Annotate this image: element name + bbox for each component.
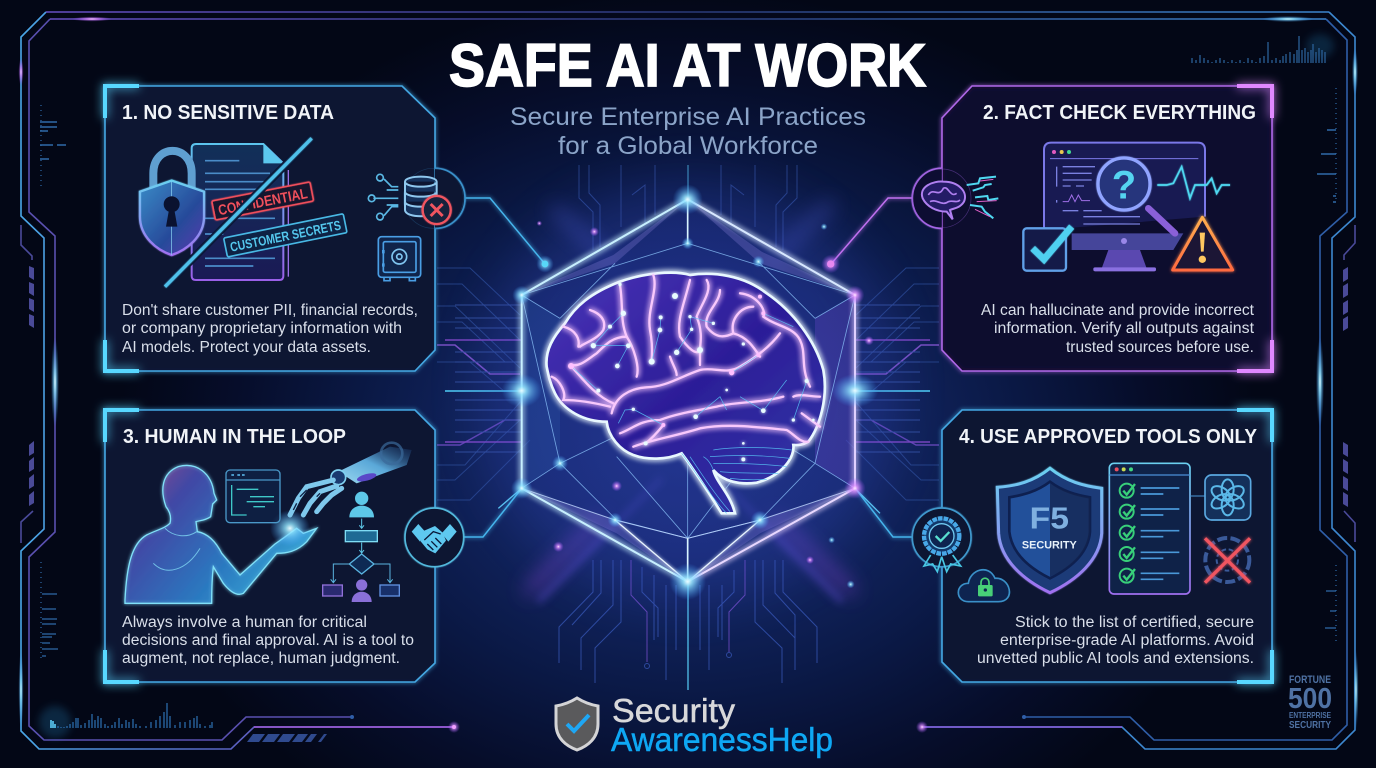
panel 1 body text: Don't share customer PII, financial records, xyxy=(122,302,418,319)
warning triangle icon xyxy=(1173,217,1233,270)
monitor icon xyxy=(1044,143,1205,271)
polyhedron inner lines xyxy=(522,243,855,538)
panel 2 body text: information. Verify all outputs against xyxy=(994,320,1255,337)
security shield: SECURITY xyxy=(1022,540,1077,552)
human figure xyxy=(125,466,317,603)
stamp: confidential: CONFIDENTIAL xyxy=(217,186,309,219)
traces right xyxy=(846,268,939,500)
connector: panel 2 to hub xyxy=(831,198,912,264)
panel 1: no sensitive data xyxy=(105,86,465,371)
document icon xyxy=(192,144,288,280)
panel 4 body text xyxy=(977,614,1254,667)
horizontal data lines xyxy=(445,305,930,452)
badge: glitching brain xyxy=(912,168,998,228)
code window xyxy=(226,470,280,523)
circuit traces around the hub xyxy=(437,165,939,690)
panel 4 frame xyxy=(942,410,1272,682)
panel 4 body text: enterprise-grade AI platforms. Avoid xyxy=(1000,632,1254,649)
glowing junctions xyxy=(502,184,878,600)
magnifier icon: ? xyxy=(1112,164,1136,208)
traces left xyxy=(437,268,530,500)
pulse line xyxy=(1157,167,1230,198)
subtitle xyxy=(510,103,866,160)
logo wordmark: Security xyxy=(612,692,736,729)
vertical traces below xyxy=(559,560,817,690)
connector: panel 1 to hub xyxy=(463,198,545,264)
brain fine lines xyxy=(572,313,807,513)
frame: left side and bottom left xyxy=(21,12,452,749)
panel 1 frame xyxy=(105,86,435,371)
security shield xyxy=(997,468,1102,593)
glow at fingertip xyxy=(270,510,310,547)
fortune 500 mark: 500 xyxy=(1288,683,1332,715)
panel 4 heading: 4. USE APPROVED TOOLS ONLY xyxy=(959,426,1258,448)
flowchart icon xyxy=(323,492,399,602)
fortune 500 mark: SECURITY xyxy=(1289,720,1331,731)
logo wordmark: AwarenessHelp xyxy=(611,721,833,758)
panel 4 body text: unvetted public AI tools and extensions. xyxy=(977,650,1254,667)
data bars: bottom left xyxy=(39,703,212,738)
polyhedron xyxy=(498,199,880,582)
panel 2: fact check everything xyxy=(912,86,1272,371)
subtitle line 2: for a Global Workforce xyxy=(558,132,818,160)
padlock shield icon xyxy=(140,151,204,255)
connector: panel 3 to hub xyxy=(463,488,522,537)
subtitle line 1: Secure Enterprise AI Practices xyxy=(510,103,866,131)
approved checklist xyxy=(1109,463,1190,594)
badge: data blocked xyxy=(368,168,465,228)
polyhedron edges xyxy=(522,199,855,582)
panel 3: human in the loop xyxy=(105,410,464,682)
connector: panel 4 to hub xyxy=(855,488,913,537)
panel 4: use approved tools only xyxy=(912,410,1272,682)
panel 3 body text: augment, not replace, human judgment. xyxy=(122,650,400,667)
central polyhedron and brain xyxy=(498,184,880,600)
cloud lock icon xyxy=(958,570,1009,602)
rejected tool icon xyxy=(1205,538,1250,583)
panel 3 body text xyxy=(122,614,414,667)
stamp: customer secrets: CUSTOMER SECRETS xyxy=(229,218,342,255)
icon: safe xyxy=(378,237,421,281)
light rays xyxy=(478,180,898,600)
data bars: top right xyxy=(1192,34,1334,63)
frame: right side and bottom right xyxy=(922,12,1355,749)
panel 1 body text: or company proprietary information with xyxy=(122,320,402,337)
panel 3 illustration xyxy=(125,443,464,603)
fortune 500 mark: FORTUNE xyxy=(1289,674,1331,686)
brain body xyxy=(546,273,825,513)
panel 1 body text xyxy=(122,302,418,356)
panel 1 heading: 1. NO SENSITIVE DATA xyxy=(122,102,334,124)
title: SAFE AI AT WORK xyxy=(449,32,926,99)
fortune 500 mark xyxy=(1288,674,1332,731)
panel 3 heading: 3. HUMAN IN THE LOOP xyxy=(123,426,346,448)
logo shield xyxy=(556,698,598,750)
panel 2 body text xyxy=(981,302,1255,356)
robot arm xyxy=(290,443,412,515)
panel 2 body text: AI can hallucinate and provide incorrect xyxy=(981,302,1255,319)
magnifier icon xyxy=(1098,158,1175,233)
tick marks xyxy=(40,88,1336,660)
logo: security awareness help xyxy=(556,692,833,758)
panel 2 illustration xyxy=(912,143,1233,271)
panel 2 body text: trusted sources before use. xyxy=(1066,339,1254,356)
panel 2 frame xyxy=(942,86,1272,371)
brain xyxy=(546,273,825,513)
badge: handshake xyxy=(405,508,464,567)
panel 3 body text: decisions and final approval. AI is a tool to xyxy=(122,632,414,649)
logo wordmark xyxy=(611,692,833,758)
slash line xyxy=(165,138,312,287)
panel 3 body text: Always involve a human for critical xyxy=(122,614,367,631)
badge: certified xyxy=(912,508,971,572)
panel 4 body text: Stick to the list of certified, secure xyxy=(1015,614,1254,631)
panel 1 body text: AI models. Protect your data assets. xyxy=(122,339,371,356)
panel 3 frame xyxy=(105,410,435,682)
panel 2 heading: 2. FACT CHECK EVERYTHING xyxy=(983,102,1256,124)
fortune 500 mark: ENTERPRISE xyxy=(1289,711,1332,720)
check box icon xyxy=(1023,227,1072,271)
panel 1 illustration xyxy=(140,138,465,287)
approved tool tile xyxy=(1190,475,1251,520)
vertical traces above xyxy=(579,165,797,250)
panel 4 illustration xyxy=(912,463,1251,602)
brain folds xyxy=(552,275,820,447)
security shield: F5 xyxy=(1030,501,1069,535)
brain nodes xyxy=(568,283,815,461)
